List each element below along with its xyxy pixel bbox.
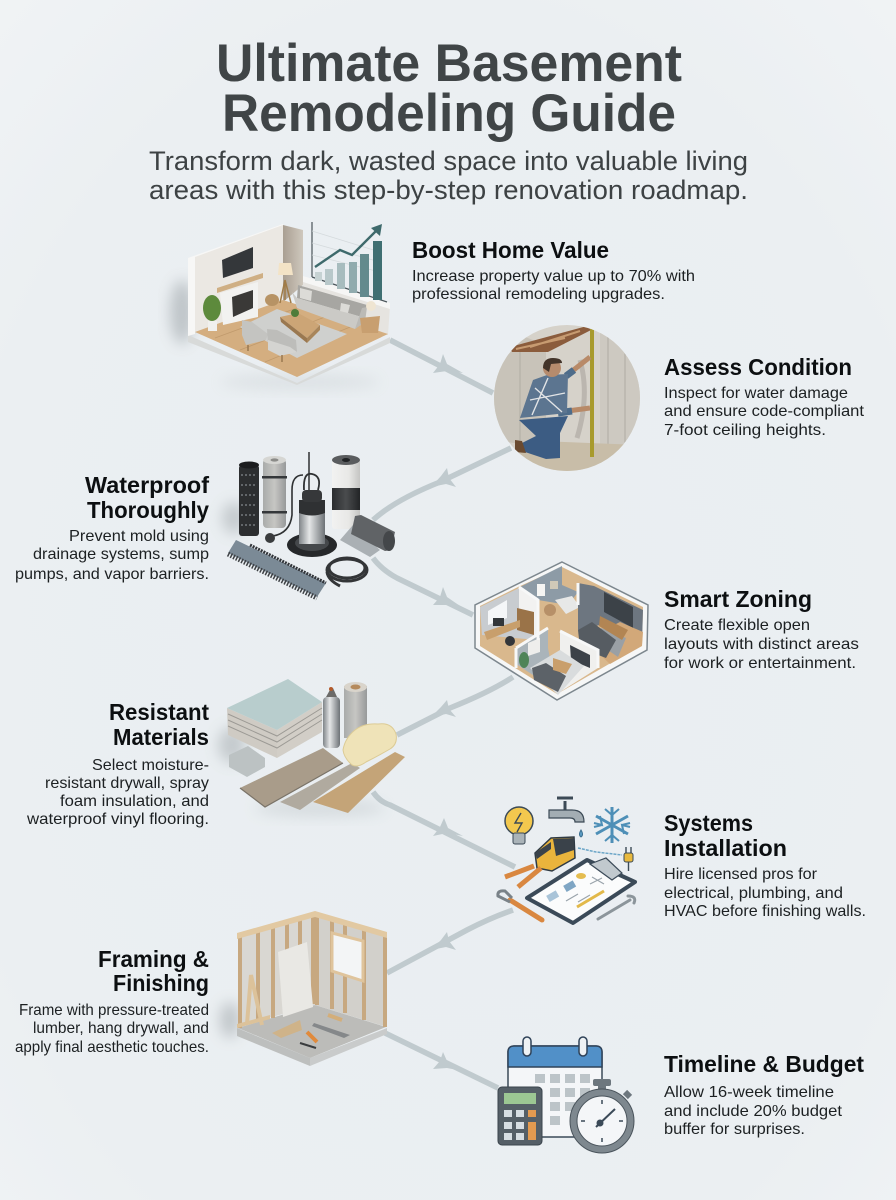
- text: boost home value: [412, 237, 695, 303]
- title: Ultimate Basement: [216, 34, 682, 93]
- chart on back wall: [312, 222, 387, 302]
- text: systems installation: electrical, plumbing, and: [664, 885, 843, 902]
- tools on floor: [272, 1015, 350, 1048]
- pliers: [505, 866, 541, 887]
- text: framing and finishing: apply final aesthetic touches.: [15, 1039, 209, 1056]
- text: systems installation: Systems: [664, 810, 753, 836]
- person: [515, 357, 590, 459]
- plug: [578, 847, 633, 871]
- arrow: value to assess: [390, 340, 493, 393]
- drywall stack: [227, 679, 322, 758]
- tool body: [535, 837, 575, 871]
- text: waterproof thoroughly: [15, 472, 209, 583]
- text: assess condition: Assess Condition: [664, 354, 852, 380]
- armchairs: [242, 320, 297, 362]
- subtitle: areas with this step-by-step renovation roadmap.: [149, 175, 748, 205]
- floor lamp: [265, 263, 293, 306]
- text: timeline and budget: buffer for surprises.: [664, 1121, 805, 1138]
- text: assess condition: [664, 354, 865, 439]
- membrane roll: [340, 515, 395, 557]
- text: waterproof thoroughly: drainage systems, sump: [33, 546, 209, 563]
- text: systems installation: Hire licensed pros for: [664, 866, 818, 883]
- calendar: [508, 1037, 602, 1137]
- text: assess condition: Inspect for water damage: [664, 385, 848, 402]
- snowflake: [594, 807, 630, 843]
- text: boost home value: Boost Home Value: [412, 237, 609, 263]
- office room: [480, 588, 538, 646]
- text: resistant materials: Select moisture-: [92, 757, 209, 774]
- text: resistant materials: waterproof vinyl flooring.: [26, 811, 209, 828]
- text: resistant materials: Resistant: [109, 699, 209, 725]
- side table: [360, 301, 380, 333]
- stopwatch: [570, 1079, 634, 1153]
- text: smart zoning: Create flexible open: [664, 617, 810, 634]
- text: resistant materials: [26, 699, 209, 828]
- left framed wall: [237, 911, 315, 1028]
- arrow: zoning to materials: [397, 677, 513, 735]
- text: timeline and budget: [664, 1051, 864, 1138]
- lumber: [247, 975, 262, 1025]
- small wrench: [598, 896, 635, 919]
- arrow: materials to systems: [373, 792, 515, 867]
- corrugated pipe: [228, 540, 326, 598]
- living zone: [516, 628, 598, 695]
- banded roll: [332, 455, 360, 529]
- icon: isometric living room with value chart: [170, 222, 390, 390]
- tv and fireplace: [217, 247, 263, 325]
- concrete block: [229, 746, 265, 777]
- arrow: assess to waterproof: [373, 448, 511, 520]
- title: Remodeling Guide: [222, 84, 676, 143]
- grey roll: [262, 456, 287, 528]
- cardboard tube: [344, 682, 367, 738]
- sump pump: [265, 452, 337, 557]
- media room: [578, 583, 643, 664]
- title: [216, 34, 682, 143]
- text: waterproof thoroughly: Prevent mold using: [69, 528, 209, 545]
- text: smart zoning: layouts with distinct areas: [664, 636, 859, 653]
- foam roll: [343, 724, 396, 766]
- faucet: [549, 798, 584, 837]
- orange wrench: [498, 891, 542, 920]
- text: waterproof thoroughly: Thoroughly: [87, 497, 209, 523]
- text: resistant materials: Materials: [113, 724, 209, 750]
- text: timeline and budget: Allow 16-week timeline: [664, 1084, 834, 1101]
- icon: wall framing corner: [220, 911, 387, 1066]
- drywall sheet: [278, 942, 313, 1017]
- arrow: waterproof to zoning: [373, 558, 473, 615]
- subtitle: [149, 146, 748, 205]
- sofa: [292, 285, 367, 329]
- text: framing and finishing: Frame with pressure-treated: [19, 1002, 209, 1019]
- icon: resistant materials: [218, 679, 405, 817]
- text: waterproof thoroughly: pumps, and vapor barriers.: [15, 566, 209, 583]
- text: boost home value: professional remodeling upgrades.: [412, 286, 665, 303]
- plant: [203, 295, 221, 331]
- calculator: [498, 1087, 542, 1145]
- text: framing and finishing: Finishing: [113, 970, 209, 996]
- arrow: systems to framing: [387, 910, 513, 973]
- mesh tube: [239, 462, 259, 536]
- lounge nook: [520, 566, 580, 616]
- icon: systems tools: [498, 798, 635, 923]
- text: framing and finishing: [15, 946, 209, 1056]
- right framed wall: [315, 911, 387, 1027]
- text: smart zoning: Smart Zoning: [664, 586, 812, 612]
- icon: smart zoning floor plan: [475, 562, 648, 700]
- text: waterproof thoroughly: Waterproof: [85, 472, 209, 498]
- text: systems installation: HVAC before finishing walls.: [664, 903, 866, 920]
- icon: calendar, calculator and stopwatch: [498, 1037, 634, 1153]
- spray can: [323, 687, 340, 748]
- text: boost home value: Increase property value up to 70% with: [412, 268, 695, 285]
- text: timeline and budget: Timeline & Budget: [664, 1051, 864, 1077]
- hose coil: [327, 558, 367, 586]
- icon: man measuring basement wall: [494, 325, 640, 471]
- subtitle: Transform dark, wasted space into valuable living: [149, 146, 748, 176]
- text: smart zoning: for work or entertainment.: [664, 655, 856, 672]
- coffee table: [280, 309, 320, 343]
- text: framing and finishing: lumber, hang drywall, and: [33, 1020, 209, 1037]
- text: timeline and budget: and include 20% budget: [664, 1103, 843, 1120]
- light bulb: [505, 807, 533, 844]
- clipboard checklist: [527, 858, 635, 923]
- text: resistant materials: resistant drywall, spray: [45, 775, 209, 792]
- text: systems installation: [664, 810, 866, 920]
- text: assess condition: 7-foot ceiling heights.: [664, 422, 826, 439]
- arrow: framing to timeline: [385, 1033, 498, 1088]
- text: assess condition: and ensure code-compliant: [664, 403, 865, 420]
- icon: waterproofing supplies: [222, 452, 395, 598]
- text: framing and finishing: Framing &: [98, 946, 209, 972]
- text: smart zoning: [664, 586, 859, 672]
- vinyl planks: [240, 748, 405, 813]
- text: systems installation: Installation: [664, 835, 787, 861]
- text: resistant materials: foam insulation, and: [60, 793, 209, 810]
